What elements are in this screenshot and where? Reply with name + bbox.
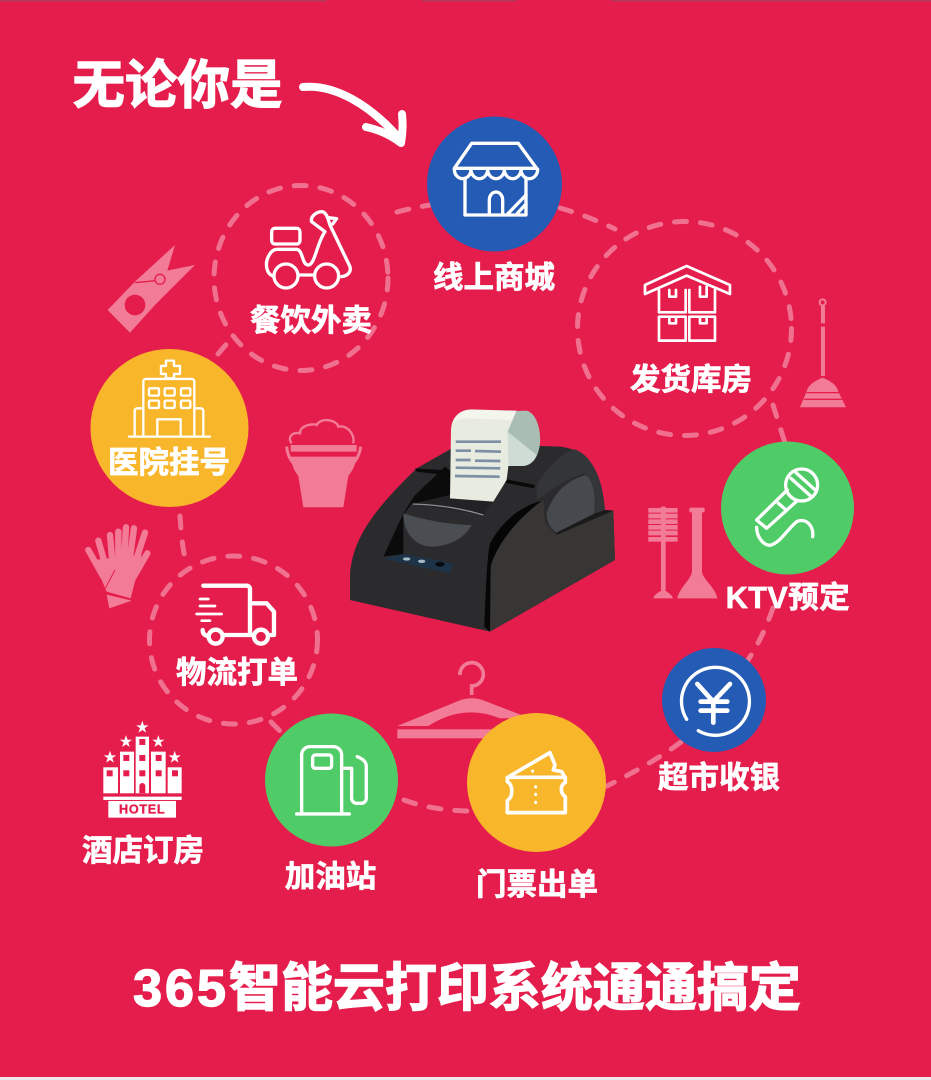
label: 餐饮外卖 (250, 304, 372, 338)
node: logistics (150, 556, 318, 724)
yellow circle (467, 713, 606, 852)
node: warehouse (578, 222, 792, 436)
label: 门票出单 (476, 868, 598, 902)
title: 无论你是 (72, 56, 283, 115)
node: KTV booking (721, 442, 854, 615)
icon: store (454, 143, 538, 215)
label: 酒店订房 (82, 834, 204, 868)
icon: plunger (677, 508, 717, 598)
bottom edge line (0, 1077, 931, 1080)
icon: clothes pin (108, 245, 195, 333)
window edge (557, 510, 613, 535)
icon: toilet brush (648, 507, 678, 598)
icon: glove (88, 527, 147, 608)
icon: bucket (287, 420, 361, 507)
arrow (303, 87, 403, 143)
label: 物流打单 (176, 656, 298, 690)
side panel (490, 500, 615, 632)
recess (383, 468, 452, 557)
label: 发货库房 (630, 363, 752, 397)
label: KTV预定 (726, 581, 850, 615)
node: supermarket checkout (658, 648, 780, 795)
icon: broom (800, 299, 846, 407)
paper (450, 409, 517, 502)
node: gas station (265, 714, 398, 894)
green circle (265, 714, 398, 846)
slot (415, 467, 535, 488)
paper roll (500, 411, 540, 466)
paper roll light (507, 432, 537, 466)
label: 医院挂号 (108, 446, 230, 480)
dashed ring (578, 222, 792, 436)
icon: warehouse (645, 266, 730, 341)
node: ticket printing (467, 713, 606, 902)
yellow circle (90, 349, 248, 507)
dashed ring (214, 186, 388, 370)
printer body (350, 445, 615, 632)
icon: hospital (129, 361, 210, 437)
flap highlight (413, 504, 483, 515)
node: online mall (427, 116, 562, 295)
node: hospital (90, 349, 248, 507)
icon: hotel (103, 721, 182, 818)
icon: coat hanger (397, 663, 530, 738)
side window (547, 475, 595, 533)
paper top band (452, 410, 516, 424)
black stripe (484, 501, 542, 632)
footer headline: 365智能云打印系统通通搞定 (133, 960, 801, 1018)
icon: fuel pump (297, 747, 366, 814)
flap top (412, 495, 493, 515)
node: food delivery (214, 186, 388, 370)
hood highlight (537, 449, 605, 513)
printer illustration (350, 409, 615, 632)
icon: scooter (266, 212, 350, 288)
green circle (721, 442, 854, 574)
blue circle (662, 648, 766, 752)
icon: truck (197, 586, 274, 644)
blue circle (427, 116, 562, 252)
node: hotel booking (82, 721, 204, 868)
control panel (383, 554, 453, 573)
icon: microphone (757, 469, 818, 545)
flap (403, 513, 472, 547)
receipt lines (455, 442, 501, 477)
icon: hotel: HOTEL (119, 803, 165, 817)
icon: yen coin (681, 667, 749, 735)
label: 加油站 (285, 860, 376, 894)
label: 超市收银 (658, 761, 780, 795)
top edge line (0, 0, 931, 2)
dashed ring (150, 556, 318, 724)
icon: ticket (507, 753, 565, 813)
panel buttons (403, 557, 445, 567)
label: 线上商城 (433, 261, 555, 295)
dashed connectors (180, 205, 785, 811)
